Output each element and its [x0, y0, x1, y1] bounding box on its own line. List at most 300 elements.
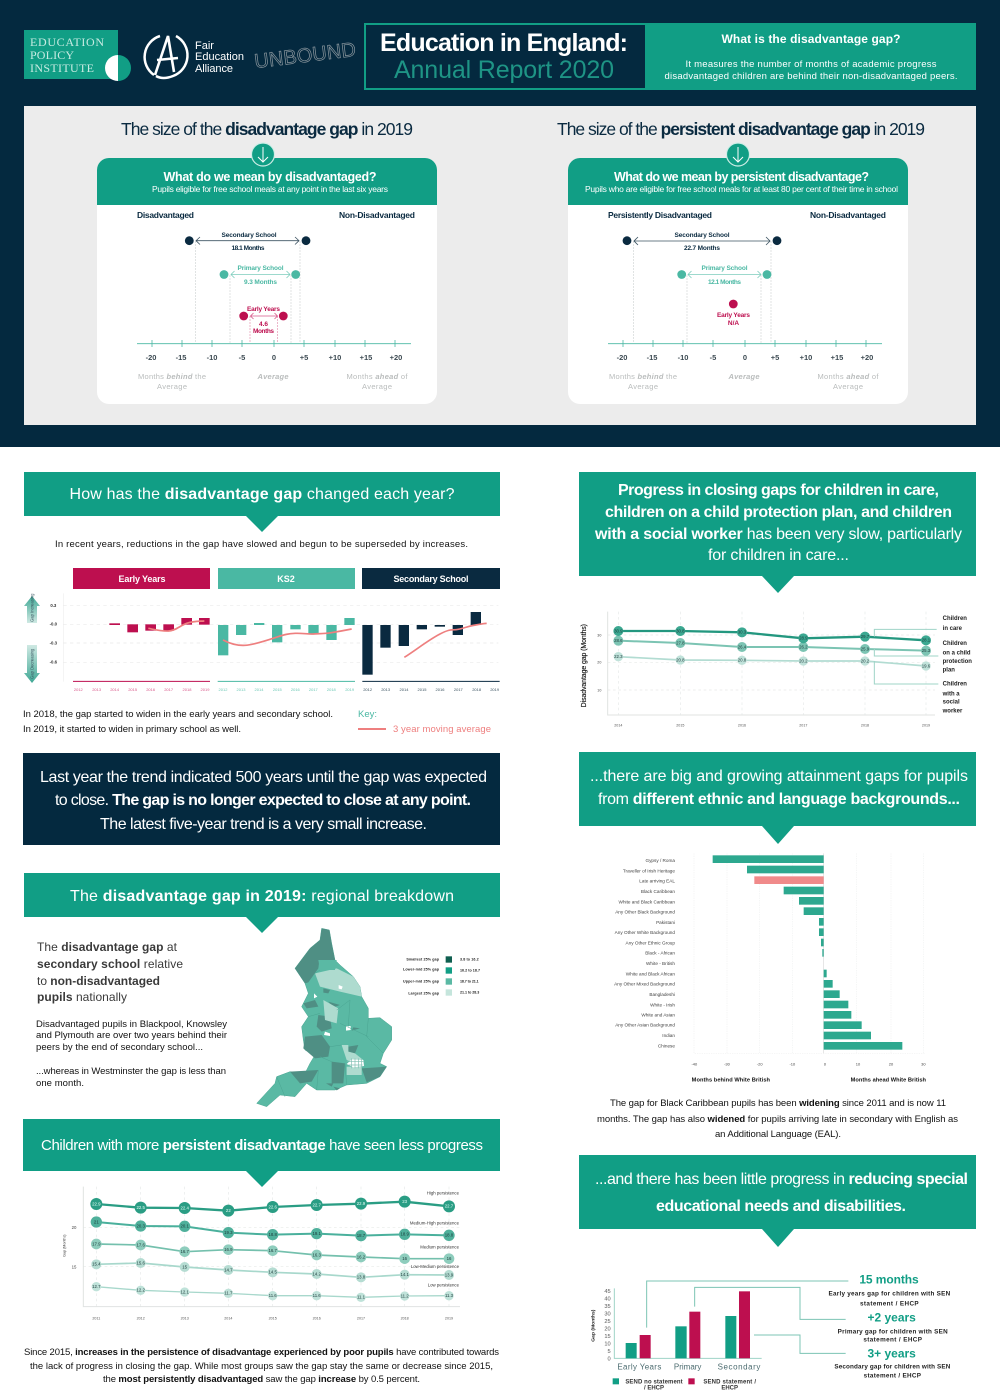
callout: trend no longer closing: to close. The gap is no longer expected to close at any point.: [55, 792, 471, 809]
series labels: [410, 1191, 460, 1287]
logo: Unbound: UNBOUND: [253, 39, 357, 73]
definition text: Pupils eligible for free school meals at any point in the last six years: [152, 184, 388, 194]
ethnicity commentary: [597, 1098, 958, 1140]
year labels: 2015: [269, 1316, 277, 1320]
early years bars: [109, 618, 210, 632]
low persistence series: 12.2: [136, 1288, 145, 1293]
callout: trend no longer closing: Last year the trend indicated 500 years until the gap was expected: [40, 769, 487, 786]
map commentary: one month.: [36, 1078, 84, 1089]
high persistence series: 22.4: [180, 1205, 189, 1210]
year labels: [614, 724, 930, 728]
title box: [365, 24, 646, 89]
medium-high persistence series: 20.3: [136, 1223, 145, 1228]
year labels: 2015: [273, 687, 283, 692]
ethnic group labels: Indian: [662, 1033, 675, 1038]
low-medium persistence series: 13.8: [357, 1275, 366, 1280]
number axis: [608, 340, 882, 362]
low-medium persistence series: 14.1: [400, 1272, 409, 1277]
bar chart: annual gap change by phase: [50, 593, 500, 692]
year labels: 2016: [436, 687, 445, 692]
line chart: social care gaps: Disadvantage gap (Months): [581, 624, 588, 707]
year labels: 2015: [676, 724, 684, 728]
heading banner: [579, 1155, 976, 1247]
high persistence series: 22.6: [268, 1204, 277, 1209]
callout: trend no longer closing: The latest five-year trend is a very small increase.: [100, 816, 427, 833]
map legend: 16.2 to 18.7: [460, 969, 480, 973]
grey panel: [24, 106, 976, 425]
high persistence series: [90, 1196, 455, 1217]
definition box: [645, 23, 976, 90]
number axis: -10: [678, 353, 688, 362]
persistence commentary: the lack of progress in closing the gap. While most groups saw the gap stay the same or decrease since 2015,: [30, 1361, 493, 1372]
year labels: 2013: [181, 1316, 189, 1320]
panel: children in care, child protection and social worker: [579, 472, 976, 728]
ethnic group labels: Black Caribbean: [641, 889, 675, 894]
axis values: 30: [921, 1062, 926, 1067]
primary school range: Primary School: [238, 265, 284, 272]
low-medium persistence series: 14.7: [224, 1267, 233, 1272]
year labels: 2017: [164, 687, 174, 692]
low persistence series: [92, 1282, 454, 1302]
series labels: on a child: [943, 651, 971, 657]
y axis values: 35: [604, 1304, 611, 1310]
year labels: 2018: [327, 687, 337, 692]
y axis values: [604, 1289, 611, 1362]
bar chart: annual gap change by phase: -0.0: [50, 622, 58, 627]
axis values: 10: [856, 1062, 861, 1067]
y axis values: 5: [608, 1349, 611, 1355]
chart legend: SEND no statement: [625, 1380, 683, 1386]
ethnic group labels: Any Other Asian Background: [615, 1023, 675, 1028]
series labels: Children: [943, 616, 967, 622]
heading banner: children on a child protection plan, and children: [605, 504, 952, 521]
early years range: Early Years: [247, 306, 280, 313]
year labels: 2014: [255, 687, 264, 692]
behind and ahead captions: Average: [362, 382, 392, 391]
low-medium persistence series: 14.5: [268, 1270, 277, 1275]
map legend: 21.1 to 28.3: [460, 991, 479, 995]
low persistence series: 11.2: [401, 1293, 409, 1298]
secondary school range: Secondary School: [674, 232, 730, 239]
phase labels: Secondary: [718, 1363, 760, 1372]
map of England: [257, 928, 392, 1107]
ethnic group labels: Any Other Mixed Background: [614, 982, 675, 987]
year labels: 2018: [861, 724, 869, 728]
year labels: 2013: [92, 687, 102, 692]
year labels: 2019: [201, 687, 210, 692]
persistence commentary: Since 2015, increases in the persistence of disadvantage experienced by poor pupils have contributed towards: [24, 1347, 499, 1358]
high persistence series: 22.5: [136, 1205, 145, 1210]
series connectors: [874, 629, 938, 684]
heading banner: How has the disadvantage gap changed each year?: [70, 486, 455, 503]
axis values: [691, 1062, 926, 1067]
medium persistence series: 16.9: [224, 1247, 233, 1252]
logo: Fair Education Alliance: [145, 36, 244, 78]
number axis: -20: [146, 353, 156, 362]
phase header: secondary school: Secondary School: [394, 574, 468, 584]
year labels: 2018: [183, 687, 192, 692]
medium-high persistence series: [91, 1216, 455, 1241]
low-medium persistence series: 15.6: [136, 1260, 145, 1265]
county borders: [277, 970, 383, 1097]
child protection plan series: 26.2: [799, 644, 808, 649]
y axis values: 25: [604, 1319, 611, 1325]
callout: secondary: statement / EHCP: [864, 1373, 921, 1380]
SEND statement bars: [640, 1291, 750, 1358]
series labels: in care: [943, 626, 963, 632]
heading banner: The disadvantage gap in 2019: regional breakdown: [70, 888, 454, 905]
phase labels: Primary: [674, 1363, 701, 1372]
ethnic group labels: White and Asian: [641, 1013, 675, 1018]
year labels: 2013: [381, 687, 391, 692]
line chart: social care gaps: 10: [597, 688, 601, 692]
year labels: 2014: [224, 1316, 232, 1320]
callout: early years: [828, 1273, 951, 1308]
heading banner: [579, 472, 976, 593]
heading banner: educational needs and disabilities.: [656, 1198, 906, 1215]
child protection plan series: 25.3: [922, 648, 931, 653]
year labels: 2019: [922, 724, 930, 728]
callout: primary: +2 years: [867, 1311, 916, 1325]
map commentary: and Plymouth are over two years behind their: [36, 1030, 227, 1041]
series labels: Low-Medium persistence: [411, 1264, 460, 1269]
series labels: Children: [943, 641, 967, 647]
phase header: early years: Early Years: [118, 574, 166, 584]
number axis: +10: [329, 353, 341, 362]
heading banner: [24, 873, 500, 933]
child protection plan series: 25.9: [861, 646, 870, 651]
medium-high persistence series: 19.3: [224, 1230, 233, 1235]
map intro text: [37, 940, 183, 1004]
year labels: 2017: [357, 1316, 365, 1320]
social worker series: [614, 652, 931, 671]
map legend: 3.8 to 16.2: [460, 958, 479, 962]
number axis: 0: [743, 353, 747, 362]
year labels: [92, 1316, 453, 1320]
ethnic group labels: White - Irish: [650, 1002, 675, 1007]
series labels: Children: [943, 682, 967, 688]
bar chart: gap by ethnicity: [614, 853, 927, 1084]
low-medium persistence series: 15.4: [92, 1262, 101, 1267]
logo: Education Policy Institute: [24, 30, 131, 81]
behind and ahead captions: Months ahead of: [346, 372, 408, 381]
high persistence series: 23: [402, 1199, 408, 1204]
definition box: What is the disadvantage gap?: [722, 32, 900, 46]
phase header: KS2: KS2: [277, 574, 295, 584]
column labels: [137, 210, 415, 220]
behind and ahead captions: Months behind the: [609, 372, 677, 381]
children in care series: 30.3: [738, 630, 747, 635]
y axis values: 30: [604, 1311, 611, 1317]
behind and ahead captions: Average: [157, 382, 187, 391]
chart legend: EHCP: [721, 1385, 738, 1391]
primary school range: [677, 265, 771, 286]
phase labels: [617, 1363, 760, 1372]
callout: early years: Early years gap for children with SEN: [828, 1291, 951, 1298]
year labels: 2018: [401, 1316, 409, 1320]
axis values: -10: [789, 1062, 796, 1067]
series labels: worker: [942, 709, 963, 715]
medium-high persistence series: 20.1: [180, 1224, 189, 1229]
medium persistence series: [91, 1239, 454, 1264]
map commentary: [36, 1019, 227, 1089]
number axis: +15: [360, 353, 372, 362]
bar chart: annual gap change by phase: 0.3: [50, 603, 57, 608]
map legend: Largest 25% gap: [408, 992, 440, 996]
y axis values: 15: [604, 1334, 611, 1340]
child protection plan series: 27.8: [676, 640, 685, 645]
low persistence series: 12.7: [92, 1284, 101, 1289]
callout: primary: statement / EHCP: [863, 1337, 922, 1344]
axis values: -30: [724, 1062, 731, 1067]
y axis values: 10: [604, 1341, 611, 1347]
year labels: [74, 687, 500, 692]
map intro text: to non-disadvantaged: [37, 974, 160, 988]
social worker series: 22.3: [614, 654, 623, 659]
medium persistence series: 16: [447, 1256, 452, 1261]
panel: special educational needs: [579, 1155, 976, 1391]
medium persistence series: 16.7: [268, 1248, 277, 1253]
panel: regional breakdown: [24, 873, 500, 1107]
ethnicity commentary: The gap for Black Caribbean pupils has been widening since 2011 and is now 11: [610, 1098, 946, 1109]
icon: gap increasing and decreasing arrows: Gap Decreasing: [30, 648, 34, 679]
social worker series: 20.8: [738, 658, 747, 663]
axis values: -40: [691, 1062, 698, 1067]
year labels: 2016: [291, 687, 301, 692]
heading banner: [579, 752, 976, 844]
heading banner: ...there are big and growing attainment gaps for pupils: [590, 768, 968, 785]
callout: primary: Primary gap for children with SEN: [838, 1328, 948, 1335]
medium persistence series: 16: [402, 1256, 408, 1261]
map intro text: The disadvantage gap at: [37, 940, 178, 954]
children in care series: 28.9: [799, 636, 808, 641]
number axis: +20: [390, 353, 402, 362]
low persistence series: 11.6: [313, 1293, 321, 1298]
number axis: -15: [647, 353, 657, 362]
series labels: [942, 616, 972, 715]
y axis values: 40: [604, 1296, 611, 1302]
number axis: +10: [800, 353, 812, 362]
child protection plan series: [613, 636, 931, 656]
behind and ahead captions: Average: [256, 372, 288, 381]
moving average lines: [148, 621, 487, 657]
title box: Annual Report 2020: [394, 56, 614, 84]
chart commentary: In 2019, it started to widen in primary school as well.: [23, 724, 241, 735]
number axis: 0: [272, 353, 276, 362]
callout: secondary: [834, 1347, 951, 1380]
year labels: 2017: [799, 724, 807, 728]
intro text: In recent years, reductions in the gap have slowed and begun to be superseded by increases.: [55, 539, 468, 550]
year labels: 2019: [345, 687, 355, 692]
children in care series: 30.9: [614, 628, 623, 633]
series labels: plan: [943, 667, 955, 673]
logo: Education Policy Institute: EDUCATION: [30, 35, 104, 49]
series labels: Medium persistence: [420, 1245, 460, 1250]
secondary school range: 22.7 Months: [684, 245, 720, 252]
heading: size of disadvantage gap: The size of the disadvantage gap in 2019: [121, 119, 413, 139]
key: moving average: Key:: [358, 709, 377, 720]
year labels: 2019: [490, 687, 500, 692]
medium-high persistence series: 19.1: [312, 1231, 321, 1236]
behind and ahead captions: [138, 372, 408, 391]
year labels: 2011: [92, 1316, 100, 1320]
gap guide lines: [196, 241, 300, 343]
definition box: disadvantaged children are behind their non-disadvantaged peers.: [664, 71, 958, 82]
heading banner: [24, 472, 500, 532]
logo: Education Policy Institute: INSTITUTE: [30, 61, 94, 75]
bar chart: annual gap change by phase: -0.3: [50, 640, 58, 645]
map commentary: peers by the end of secondary school...: [36, 1042, 203, 1053]
axis values: -20: [757, 1062, 763, 1067]
y axis values: 45: [604, 1289, 611, 1295]
behind and ahead captions: Months ahead of: [818, 372, 879, 381]
primary school range: 12.1 Months: [708, 279, 741, 286]
year labels: 2014: [110, 687, 120, 692]
year labels: 2012: [137, 1316, 145, 1320]
logo: Fair Education Alliance: Alliance: [195, 63, 233, 75]
number axis: -15: [176, 353, 186, 362]
low-medium persistence series: 13.9: [445, 1272, 454, 1277]
heading banner: Progress in closing gaps for children in care,: [618, 482, 939, 499]
line chart: social care gaps: 30: [597, 633, 601, 637]
ethnic group labels: Chinese: [658, 1043, 675, 1048]
ethnic group labels: Any Other Ethnic Group: [626, 940, 675, 945]
early years range: 4.6: [259, 321, 268, 328]
year labels: 2016: [313, 1316, 321, 1320]
ethnic group labels: Traveller of Irish Heritage: [623, 868, 675, 873]
bar chart: annual gap change by phase: -0.6: [50, 660, 58, 665]
high persistence series: 22: [226, 1208, 231, 1213]
series labels: social: [943, 700, 960, 706]
medium persistence series: 17.9: [92, 1241, 101, 1246]
year labels: 2018: [472, 687, 482, 692]
secondary school bars: [362, 612, 481, 675]
number axis: +5: [300, 353, 308, 362]
panel: disadvantage gap number line: [97, 143, 437, 404]
callout: early years: 15 months: [859, 1273, 919, 1287]
callout: early years: statement / EHCP: [860, 1301, 919, 1308]
ethnic group labels: Bangladeshi: [649, 992, 675, 997]
high persistence series: 22.7: [445, 1204, 454, 1209]
year labels: 2017: [309, 687, 319, 692]
phase header: KS2: [218, 568, 355, 589]
number axis: +20: [861, 353, 873, 362]
year labels: 2013: [237, 687, 246, 692]
map commentary: Disadvantaged pupils in Blackpool, Knowsley: [36, 1019, 227, 1030]
logo: Fair Education Alliance: Fair: [195, 40, 214, 52]
map legend: Smallest 25% gap: [406, 958, 440, 962]
y axis values: 0: [608, 1356, 611, 1362]
early years not available: Early Years: [717, 312, 750, 319]
ethnic group labels: White and Black Caribbean: [619, 899, 675, 904]
year labels: 2017: [454, 687, 464, 692]
year labels: 2015: [128, 687, 138, 692]
ethnic group labels: Black - African: [645, 951, 675, 956]
definition text: Pupils who are eligible for free school meals for at least 80 per cent of their time in school: [585, 184, 898, 194]
map legend: Lower-mid 25% gap: [403, 968, 440, 972]
ethnic group labels: Late arriving EAL: [639, 879, 675, 884]
medium persistence series: 16.2: [357, 1254, 366, 1259]
column labels: Disadvantaged: [137, 210, 194, 220]
early years range: [239, 306, 288, 335]
medium-high persistence series: 18.9: [400, 1232, 409, 1237]
logo: Education Policy Institute: POLICY: [30, 48, 74, 62]
low persistence series: 11.7: [224, 1291, 233, 1296]
axis values: 0: [824, 1062, 827, 1067]
heading banner: [23, 1119, 500, 1187]
axis titles: Months behind White British: [692, 1078, 771, 1084]
social worker series: 20.2: [799, 658, 808, 663]
chart legend: SEND statement /: [703, 1380, 756, 1386]
map legend: Upper-mid 25% gap: [403, 980, 440, 984]
chart legend: / EHCP: [644, 1385, 664, 1391]
medium persistence series: 16.7: [180, 1249, 189, 1254]
bar chart: SEND gaps: Gap (Months): [590, 1309, 596, 1342]
year labels: 2016: [738, 724, 746, 728]
behind and ahead captions: Months behind the: [138, 372, 206, 381]
low persistence series: 11.3: [445, 1293, 454, 1298]
ethnic group labels: White - British: [646, 961, 675, 966]
number axis: -10: [207, 353, 217, 362]
medium persistence series: 17.6: [136, 1242, 145, 1247]
icon: down arrow: [252, 143, 274, 166]
children in care series: [613, 626, 931, 645]
number axis: -20: [617, 353, 627, 362]
map intro text: secondary school relative: [37, 957, 183, 971]
header band: [0, 0, 1000, 447]
high persistence series: 22.7: [312, 1202, 321, 1207]
behind and ahead captions: Average: [728, 372, 760, 381]
ethnic group labels: White and Black African: [626, 971, 675, 976]
ethnic group labels: Any Other Black Background: [615, 910, 675, 915]
heading banner: ...and there has been little progress in reducing special: [595, 1171, 968, 1188]
panel: persistent disadvantage gap number line: [568, 143, 908, 404]
line chart: gap by persistence of disadvantage: [63, 1187, 460, 1320]
medium-high persistence series: 18.8: [268, 1232, 277, 1237]
early years range: Months: [253, 328, 274, 335]
icon: gap increasing and decreasing arrows: [24, 593, 40, 683]
series labels: High persistence: [427, 1191, 460, 1196]
column labels: Non-Disadvantaged: [810, 210, 886, 220]
column labels: [608, 210, 886, 220]
ethnicity commentary: an Additional Language (EAL).: [715, 1129, 841, 1140]
series labels: with a: [942, 691, 960, 697]
line chart: gap by persistence of disadvantage: 20: [72, 1225, 77, 1230]
secondary school range: 18.1 Months: [232, 245, 265, 252]
heading banner: from different ethnic and language backgrounds...: [598, 791, 960, 808]
low persistence series: 11.1: [357, 1295, 366, 1300]
child protection plan series: 26.4: [738, 644, 747, 649]
key: moving average: [358, 709, 491, 735]
callout: trend no longer closing: [23, 753, 500, 845]
heading banner: Children with more persistent disadvantage have seen less progress: [41, 1137, 483, 1154]
low persistence series: 11.6: [269, 1293, 277, 1298]
ethnic group labels: [614, 858, 675, 1048]
persistence commentary: [24, 1347, 499, 1385]
map intro text: pupils nationally: [37, 990, 127, 1004]
callout: secondary: Secondary gap for children with SEN: [834, 1363, 951, 1370]
connectors: [647, 1281, 848, 1353]
phase header: early years: [73, 568, 210, 589]
children in care series: 30.8: [676, 628, 685, 633]
social worker series: 19.6: [922, 663, 931, 668]
year labels: 2014: [400, 687, 409, 692]
social worker series: 20.8: [676, 657, 685, 662]
high persistence series: 22.9: [357, 1201, 366, 1206]
early years not available: [717, 300, 750, 327]
icon: gap increasing and decreasing arrows: Gap Increasing: [30, 593, 34, 622]
line chart: gap by persistence of disadvantage: 15: [72, 1264, 77, 1269]
